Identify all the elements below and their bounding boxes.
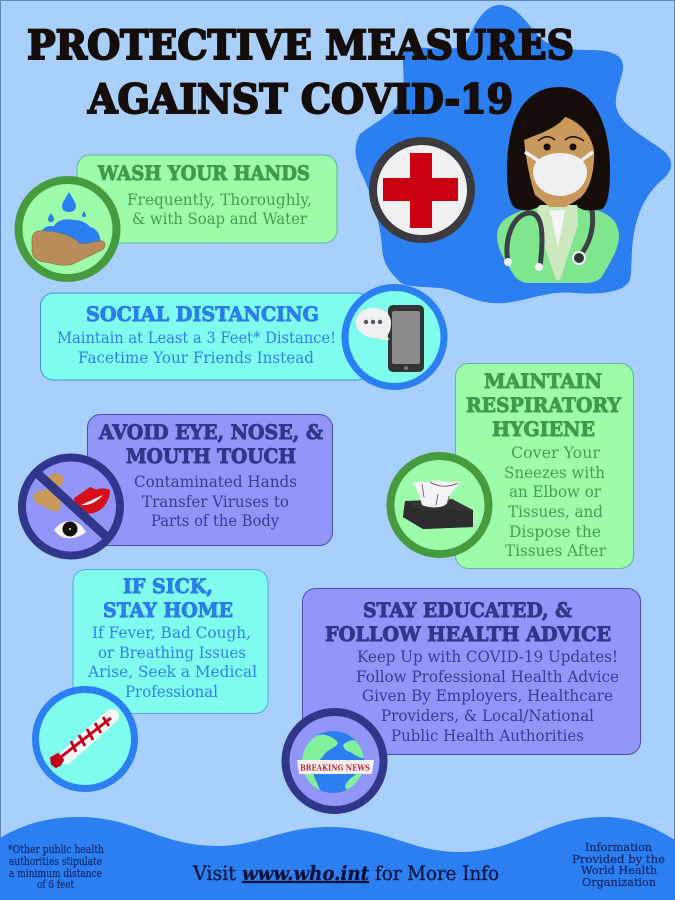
footer: visit link line: for More Info — [375, 861, 499, 885]
heading: respiratory hygiene: MAINTAIN — [484, 369, 602, 393]
heading: respiratory hygiene — [466, 369, 622, 441]
decorative blue blob behind doctor — [356, 5, 671, 303]
heading: avoid touch — [98, 420, 323, 468]
text: avoid touch details — [134, 473, 297, 530]
footnote: minimum distance: of 6 feet — [37, 878, 74, 891]
text: social distancing details: Maintain at Least a 3 Feet* Distance! — [57, 329, 336, 347]
text: if sick details — [87, 624, 257, 701]
footer: visit link line: Visit — [192, 861, 236, 885]
text: stay educated details — [356, 648, 619, 745]
illustration: doctor with mask and stethoscope — [497, 87, 619, 283]
icon: phone with chat bubble — [345, 288, 444, 386]
panel: if sick, stay home — [73, 570, 268, 714]
text: avoid touch details: Parts of the Body — [151, 512, 279, 530]
text: avoid touch details: Transfer Viruses to — [142, 493, 289, 511]
text: respiratory hygiene details: Tissues, and — [508, 503, 603, 521]
text: respiratory hygiene details: an Elbow or — [509, 483, 602, 501]
text: wash details: & with Soap and Water — [132, 210, 308, 228]
text: stay educated details: Public Health Authorities — [391, 727, 584, 745]
text: if sick details: If Fever, Bad Cough, — [92, 624, 251, 642]
footer: information source: Information — [585, 841, 652, 854]
text: avoid touch details: Contaminated Hands — [134, 473, 297, 491]
text: social distancing details: Facetime Your Friends Instead — [78, 349, 314, 367]
footer: bottom wave — [0, 817, 675, 900]
heading: if sick: IF SICK, — [123, 574, 213, 598]
text: stay educated details: Given By Employers, Healthcare — [362, 687, 613, 705]
heading: respiratory hygiene: RESPIRATORY — [466, 393, 622, 417]
heading: if sick — [103, 574, 233, 622]
panel: social distancing — [40, 293, 370, 380]
text: stay educated details: Providers, & Local/National — [381, 707, 594, 725]
heading: if sick: STAY HOME — [103, 598, 233, 622]
heading: avoid touch: MOUTH TOUCH — [126, 444, 296, 468]
panel: wash your hands — [77, 155, 337, 243]
footer: visit link line — [192, 861, 499, 885]
heading: wash your hands: WASH YOUR HANDS — [97, 161, 310, 185]
title: PROTECTIVE MEASURES — [27, 22, 574, 69]
text: if sick details: Professional — [125, 683, 218, 701]
footer: information source — [572, 841, 665, 889]
text: respiratory hygiene details: Tissues After — [505, 542, 607, 560]
footnote: minimum distance — [8, 843, 104, 891]
heading: stay educated: STAY EDUCATED, & — [363, 598, 572, 622]
panel: avoid eye, nose and mouth touch — [88, 414, 332, 546]
icon: globe with breaking news banner — [286, 712, 384, 810]
icon: globe with breaking news banner: BREAKING NEWS — [300, 762, 370, 772]
heading: stay educated — [325, 598, 611, 646]
icon: thermometer — [36, 690, 134, 788]
footer: visit link line: www.who.int — [242, 861, 370, 885]
icon: washing hand — [18, 180, 116, 278]
text: respiratory hygiene details: Dispose the — [509, 523, 601, 541]
text: respiratory hygiene details — [504, 444, 607, 560]
panel: stay educated — [302, 588, 640, 754]
icon: red cross — [373, 141, 471, 239]
title — [27, 22, 574, 123]
text: wash details: Frequently, Thoroughly, — [127, 191, 312, 209]
heading: social distancing: SOCIAL DISTANCING — [86, 302, 319, 326]
icon: no touching face — [22, 458, 120, 556]
footnote: minimum distance: *Other public health — [8, 843, 104, 856]
text: social distancing details — [57, 329, 336, 367]
text: wash details — [127, 191, 312, 228]
text: respiratory hygiene details: Cover Your — [511, 444, 601, 462]
text: if sick details: Arise, Seek a Medical — [87, 663, 257, 681]
footer: information source: Provided by the — [572, 853, 665, 866]
heading: stay educated: FOLLOW HEALTH ADVICE — [325, 622, 611, 646]
text: stay educated details: Keep Up with COVID-19 Updates! — [357, 648, 618, 666]
icon: tissue box — [390, 456, 488, 554]
panel: maintain respiratory hygiene — [456, 364, 634, 568]
footer: information source: World Health — [581, 864, 657, 877]
footnote: minimum distance: authorities stipulate — [9, 855, 102, 868]
text: if sick details: or Breathing Issues — [98, 644, 246, 662]
heading: respiratory hygiene: HYGIENE — [492, 417, 595, 441]
heading: avoid touch: AVOID EYE, NOSE, & — [98, 420, 323, 444]
footer: information source: Organization — [582, 876, 656, 889]
title: AGAINST COVID-19 — [87, 76, 513, 123]
text: respiratory hygiene details: Sneezes with — [504, 464, 605, 482]
footnote: minimum distance: a minimum distance — [9, 867, 102, 880]
text: stay educated details: Follow Professional Health Advice — [356, 668, 619, 686]
